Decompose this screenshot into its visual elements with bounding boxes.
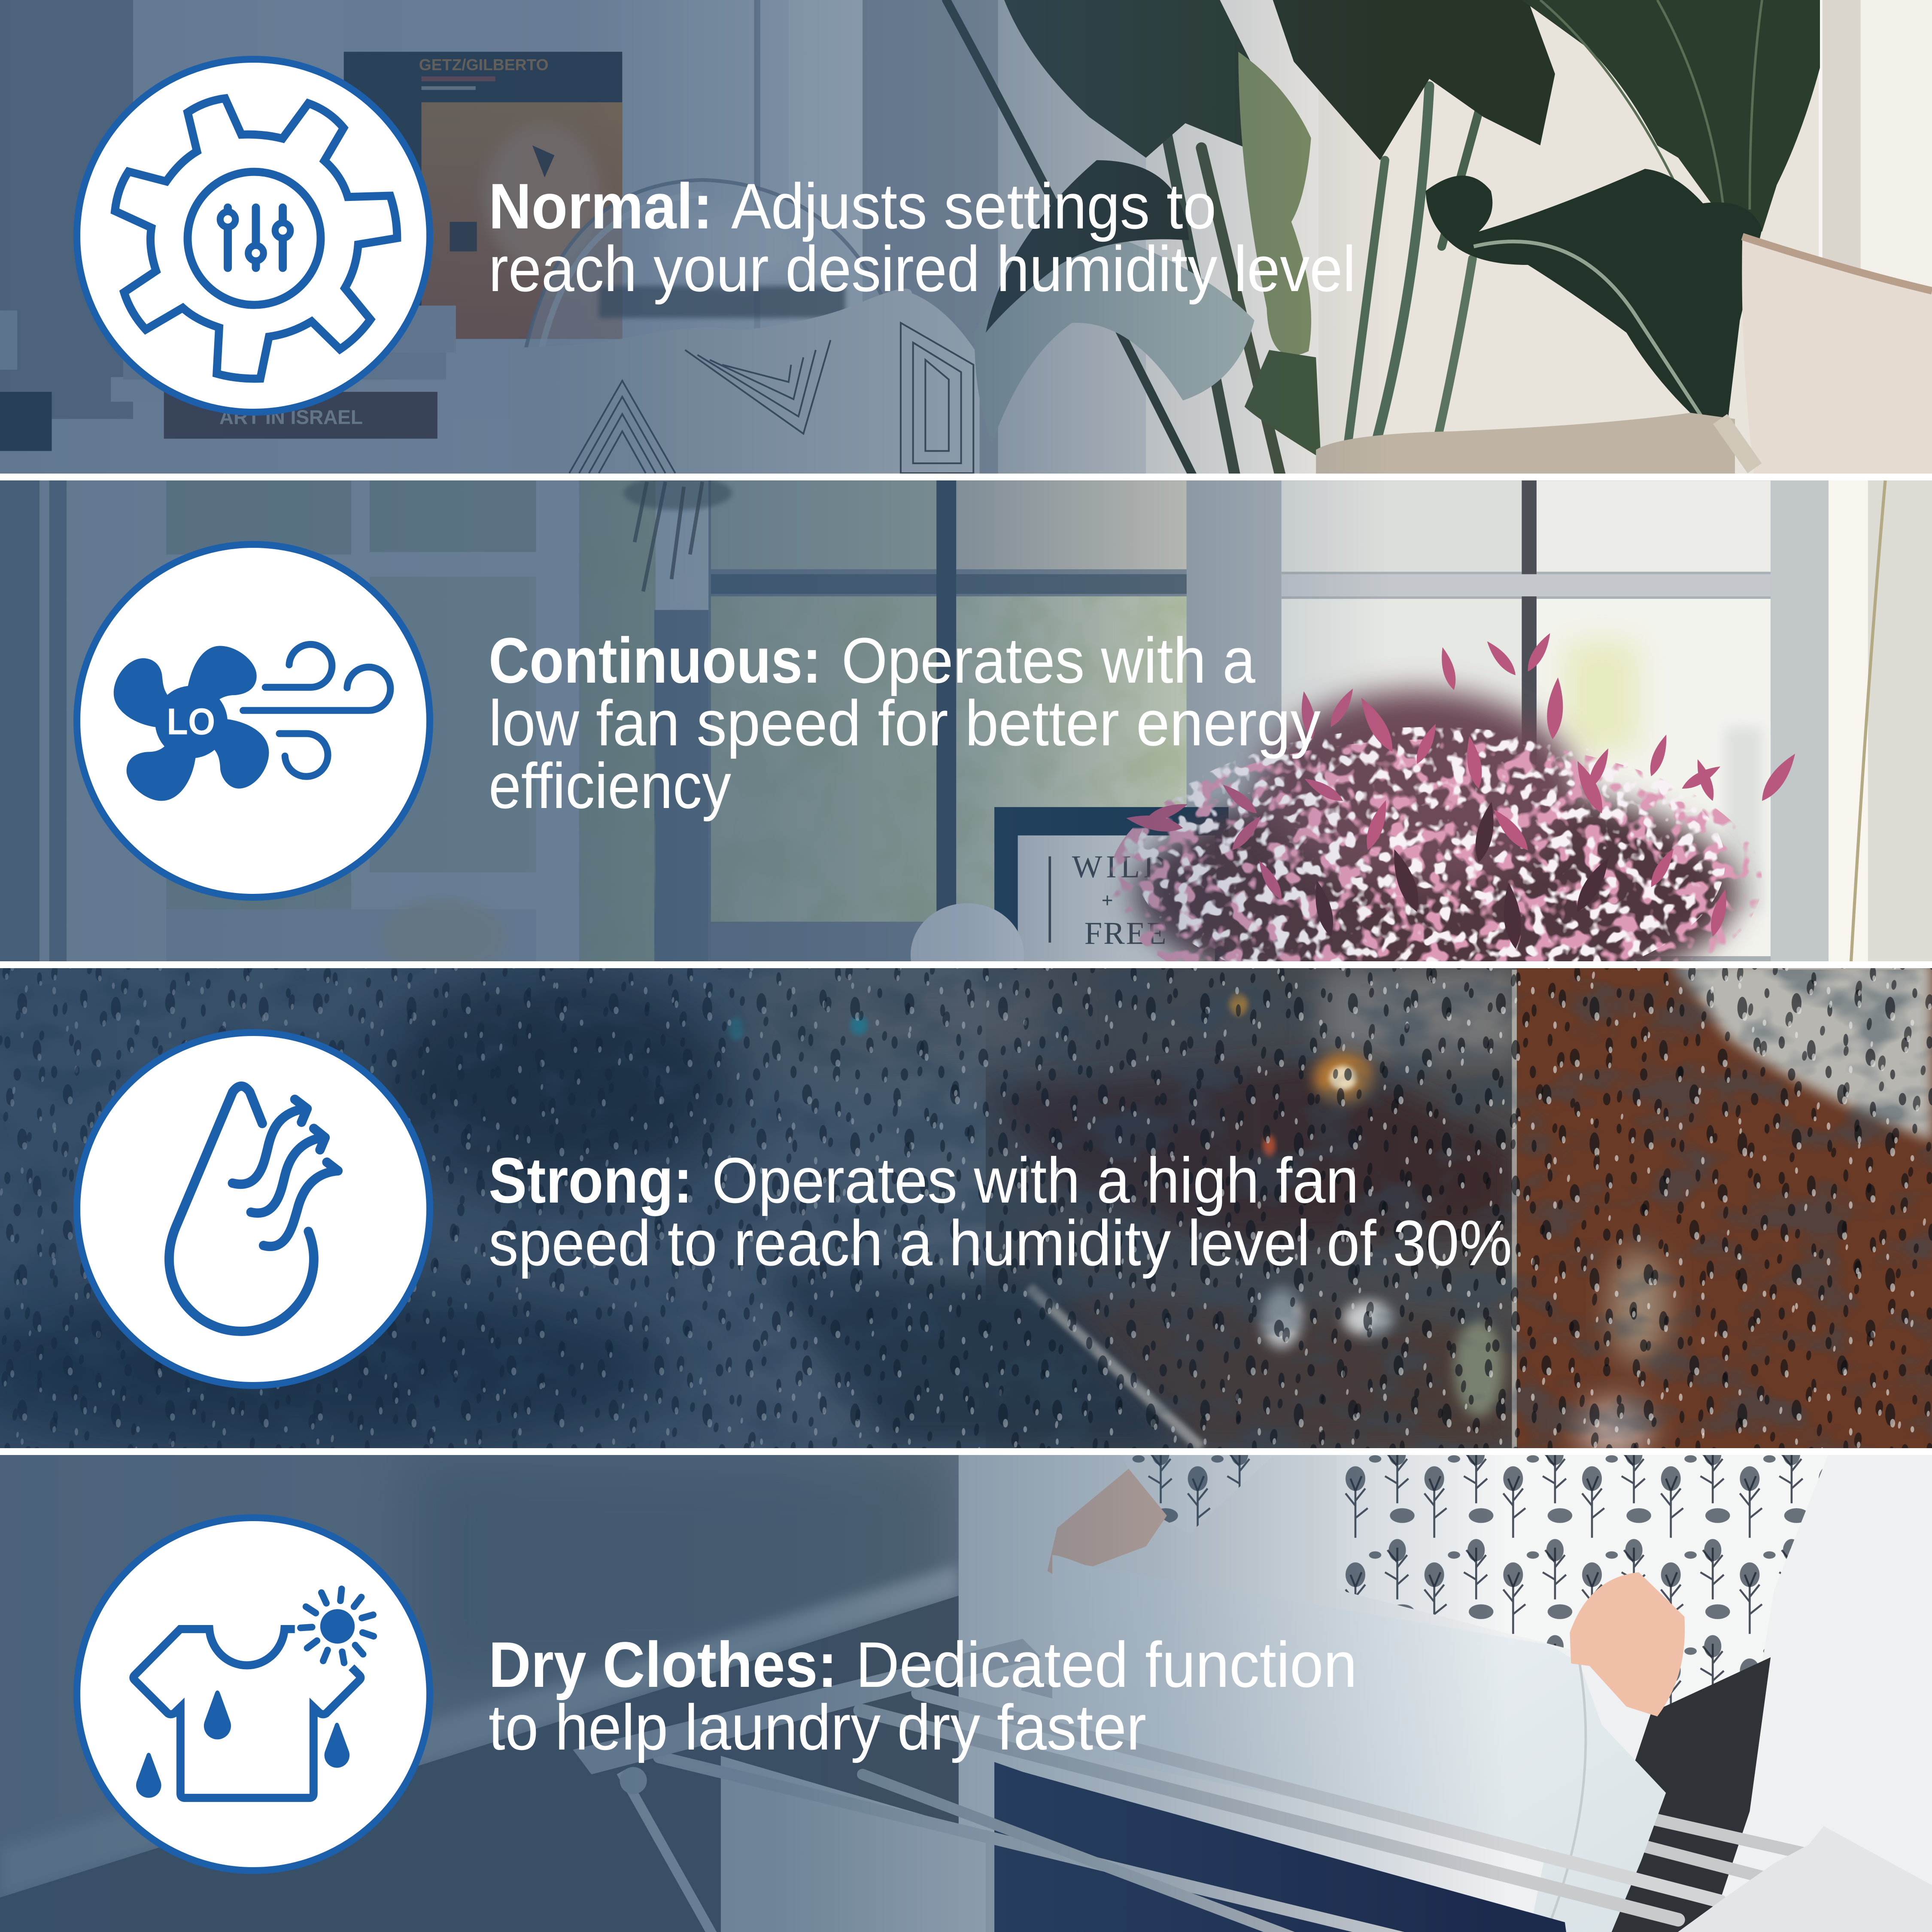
background photo: window with purple plant: [0, 474, 1932, 1023]
icon badge: gear with sliders: [77, 59, 430, 412]
glass dome: [513, 180, 902, 473]
background photo: living room with plant: ART IN ISRAEL: [219, 406, 363, 428]
rack frame: [573, 1639, 1041, 1774]
rear bars: [1023, 1684, 1809, 1879]
text: Normal description: reach your desired humidity level: [489, 233, 1356, 305]
background photo: rain on window: [0, 961, 1932, 1459]
stems: [946, 0, 1510, 480]
text: Normal description: Normal:: [489, 170, 713, 242]
background photo: living room with plant: [0, 0, 1932, 480]
white sheet: [1052, 1555, 1666, 1932]
overlay: [0, 1448, 1932, 1932]
text: Continuous description: Operates with a: [841, 624, 1256, 696]
left fabric: [721, 1756, 1041, 1932]
icon badge: low fan speed: [77, 544, 430, 897]
panel: Dry Clothes mode: [0, 1448, 1932, 1932]
text: Strong description: speed to reach a humidity level of 30%: [489, 1207, 1512, 1279]
text: Strong description: [489, 1144, 1512, 1279]
books: [111, 377, 462, 402]
text: Dry Clothes description: Dedicated function: [856, 1628, 1357, 1701]
overlay: [0, 0, 1932, 480]
left hand: [1048, 1469, 1167, 1580]
text: Dry Clothes description: [489, 1628, 1357, 1763]
panel: Continuous mode: [0, 474, 1932, 1023]
text: Normal description: [489, 170, 1356, 305]
icon badge: low fan speed: LO: [167, 701, 215, 742]
trousers: [1602, 1657, 1771, 1932]
icon badge: water drop with rising air: [77, 1033, 430, 1385]
text: Continuous description: efficiency: [489, 750, 731, 822]
bars: [659, 1693, 1720, 1932]
armchair and cushion: [1316, 413, 1735, 480]
background photo: laundry on drying rack: [0, 1448, 1932, 1932]
text: Continuous description: [489, 624, 1321, 822]
leaves: [1004, 0, 1257, 158]
hanging dreamcatcher: [635, 482, 702, 592]
text: Continuous description: Continuous:: [489, 624, 821, 696]
framed print: FREE: [1084, 916, 1167, 951]
framed print: [994, 807, 1228, 971]
framed print: WILD: [1072, 849, 1170, 884]
overlay: [0, 961, 1932, 1454]
panel: Normal mode: [0, 0, 1932, 480]
text: Dry Clothes description: to help laundry dry faster: [489, 1691, 1146, 1763]
text: Continuous description: low fan speed for better energy: [489, 687, 1321, 759]
framed print: +: [1102, 889, 1113, 911]
text: Strong description: Operates with a high fan: [712, 1144, 1359, 1216]
overlay: [0, 474, 1932, 967]
poster: [344, 52, 622, 339]
background photo: living room with plant: GETZ/GILBERTO: [419, 56, 549, 74]
text: Dry Clothes description: Dry Clothes:: [489, 1628, 837, 1701]
icon badge: drying shirt with sun: [77, 1518, 430, 1871]
navy fabric: [994, 1762, 1567, 1932]
shirt: [1119, 1448, 1831, 1715]
right hand: [1570, 1572, 1685, 1716]
text: Normal description: Adjusts settings to: [731, 170, 1216, 242]
text: Strong description: Strong:: [489, 1144, 693, 1216]
panel: Strong mode: [0, 961, 1932, 1459]
purple plant: [1109, 630, 1801, 1023]
foliage outside: [166, 474, 1187, 967]
centre pillow: [510, 289, 980, 480]
